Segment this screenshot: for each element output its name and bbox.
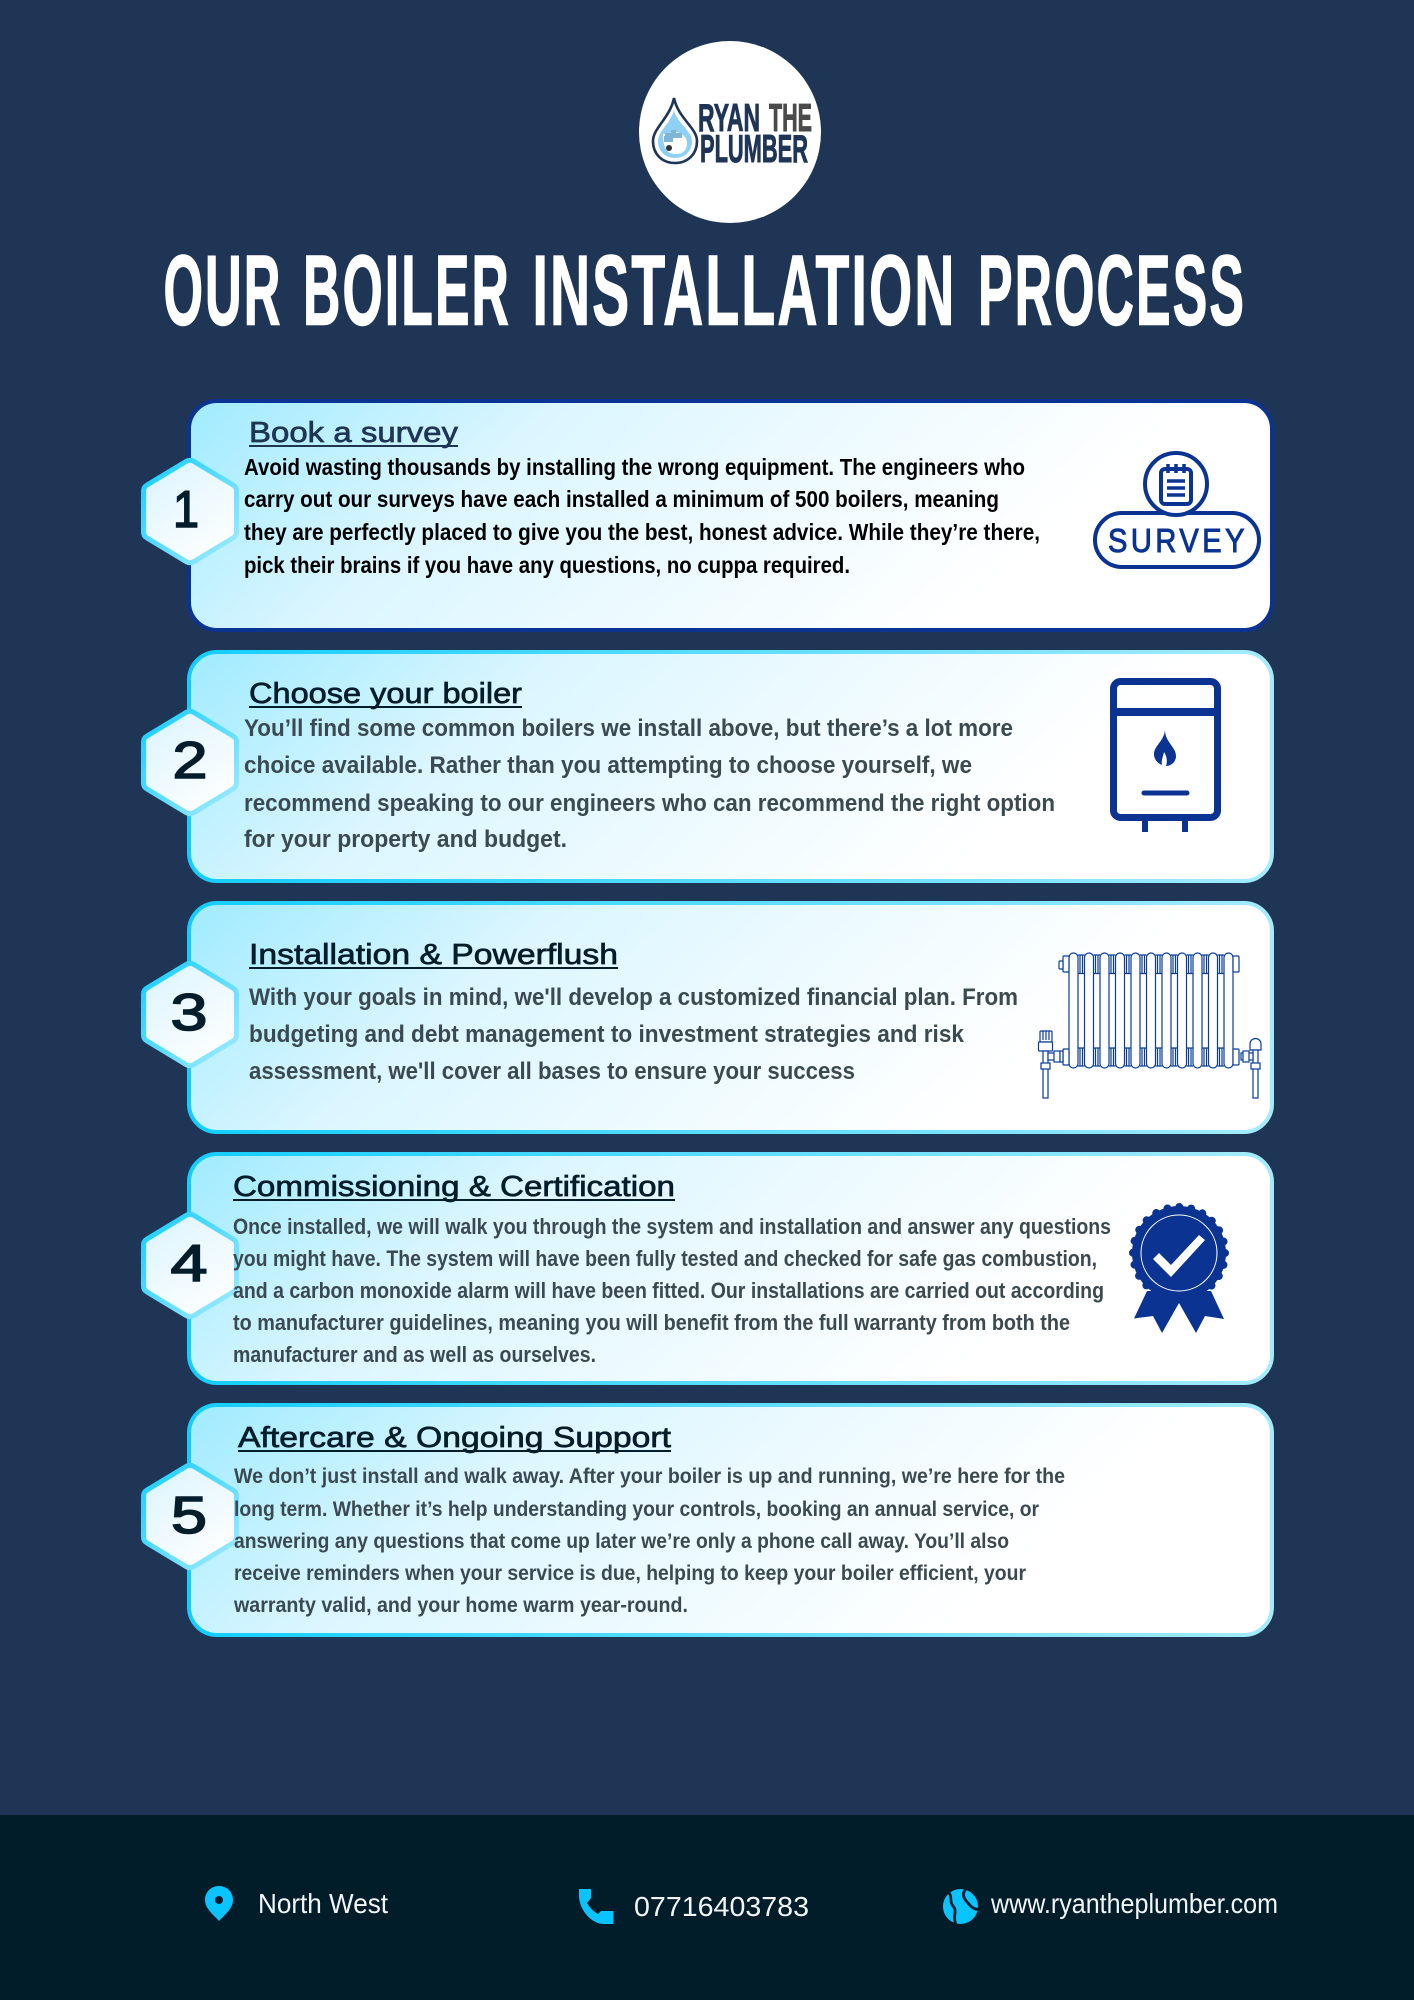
step 3 text: budgeting and debt management to investment strategies and risk [249,1021,964,1048]
step 5 heading: Aftercare & Ongoing Support [238,1422,671,1454]
icon: rosette with check mark [1132,1206,1226,1333]
icon: radiator [1038,953,1261,1098]
step 4 text: to manufacturer guidelines, meaning you will benefit from the full warranty from both the [233,1310,1070,1335]
panel: step 4 commissioning and certification [144,1154,1272,1383]
step 5 text: warranty valid, and your home warm year-round. [233,1594,688,1617]
step 4 heading: Commissioning & Certification [233,1171,675,1203]
step 3 text: With your goals in mind, we'll develop a customized financial plan. From [249,984,1018,1011]
panel: step 2 choose your boiler [144,652,1272,881]
location [205,1886,388,1921]
location: North West [258,1888,388,1919]
step 5 text: We don’t just install and walk away. After your boiler is up and running, we’re here for the [234,1465,1065,1488]
icon: water drop with tap [653,98,697,163]
website [943,1888,1278,1924]
icon: survey [1095,453,1259,567]
logo wordmark: PLUMBER [700,128,808,171]
phone: 07716403783 [634,1891,809,1922]
title: INSTALLATION [532,234,956,346]
phone [579,1889,809,1924]
logo wordmark [698,97,812,171]
step 1 text [244,454,1040,578]
step 1 number badge: 1 [173,481,199,539]
step 2 number badge [144,711,236,814]
step 5 text: long term. Whether it’s help understanding your controls, booking an annual service, or [234,1498,1039,1521]
step 3 text [249,984,1018,1085]
step 4 text: and a carbon monoxide alarm will have been fitted. Our installations are carried out according [233,1278,1104,1303]
step 2 number badge: 2 [172,732,208,790]
step 4 number badge: 4 [170,1235,208,1293]
step 1 text: they are perfectly placed to give you the best, honest advice. While they’re there, [244,519,1040,545]
title: OUR [164,234,282,346]
logo wordmark: THE [769,97,812,140]
footer [0,1815,1414,2000]
icon: map pin [205,1886,233,1921]
step 2 text: choice available. Rather than you attempting to choose yourself, we [244,752,972,779]
panel: step 3 installation and powerflush [144,903,1272,1132]
step 4 text: manufacturer and as well as ourselves. [233,1342,596,1367]
panel: step 5 aftercare and ongoing support [144,1405,1272,1635]
step 2 text: for your property and budget. [244,826,567,853]
step 2 text: You’ll find some common boilers we install above, but there’s a lot more [244,715,1013,742]
step 5 text: answering any questions that come up later we’re only a phone call away. You’ll also [234,1530,1009,1553]
step 5 text [233,1465,1065,1617]
step 3 number badge: 3 [170,984,208,1042]
step 5 number badge [144,1465,236,1568]
step 3 text: assessment, we'll cover all bases to ensure your success [249,1058,855,1085]
logo wordmark: RYAN [698,97,760,140]
panel: step 1 book a survey [144,401,1272,630]
step 2 heading: Choose your boiler [249,678,522,710]
title [164,234,1246,346]
step 2 text [244,715,1055,853]
step 1 number badge [144,460,236,563]
step 3 heading: Installation & Powerflush [249,939,618,971]
title: BOILER [303,234,511,346]
icon: globe [943,1889,979,1924]
logo [639,41,821,223]
icon: boiler [1111,682,1220,832]
step 5 number badge: 5 [171,1487,207,1545]
step 4 text: Once installed, we will walk you through the system and installation and answer any questions [233,1214,1111,1239]
step 3 number badge [144,963,236,1066]
step 4 text [233,1214,1111,1367]
icon: phone [579,1889,614,1924]
step 2 text: recommend speaking to our engineers who can recommend the right option [244,790,1055,817]
step 4 text: you might have. The system will have been fully tested and checked for safe gas combustion, [233,1246,1097,1271]
step 5 text: receive reminders when your service is due, helping to keep your boiler efficient, your [234,1562,1026,1585]
step 1 text: pick their brains if you have any questions, no cuppa required. [244,552,850,578]
step 1 text: carry out our surveys have each installed a minimum of 500 boilers, meaning [244,486,999,512]
step 1 text: Avoid wasting thousands by installing the wrong equipment. The engineers who [244,454,1025,480]
icon: survey: SURVEY [1108,522,1248,559]
step 4 number badge [144,1214,236,1317]
website: www.ryantheplumber.com [990,1888,1278,1919]
step 1 heading: Book a survey [249,417,459,449]
